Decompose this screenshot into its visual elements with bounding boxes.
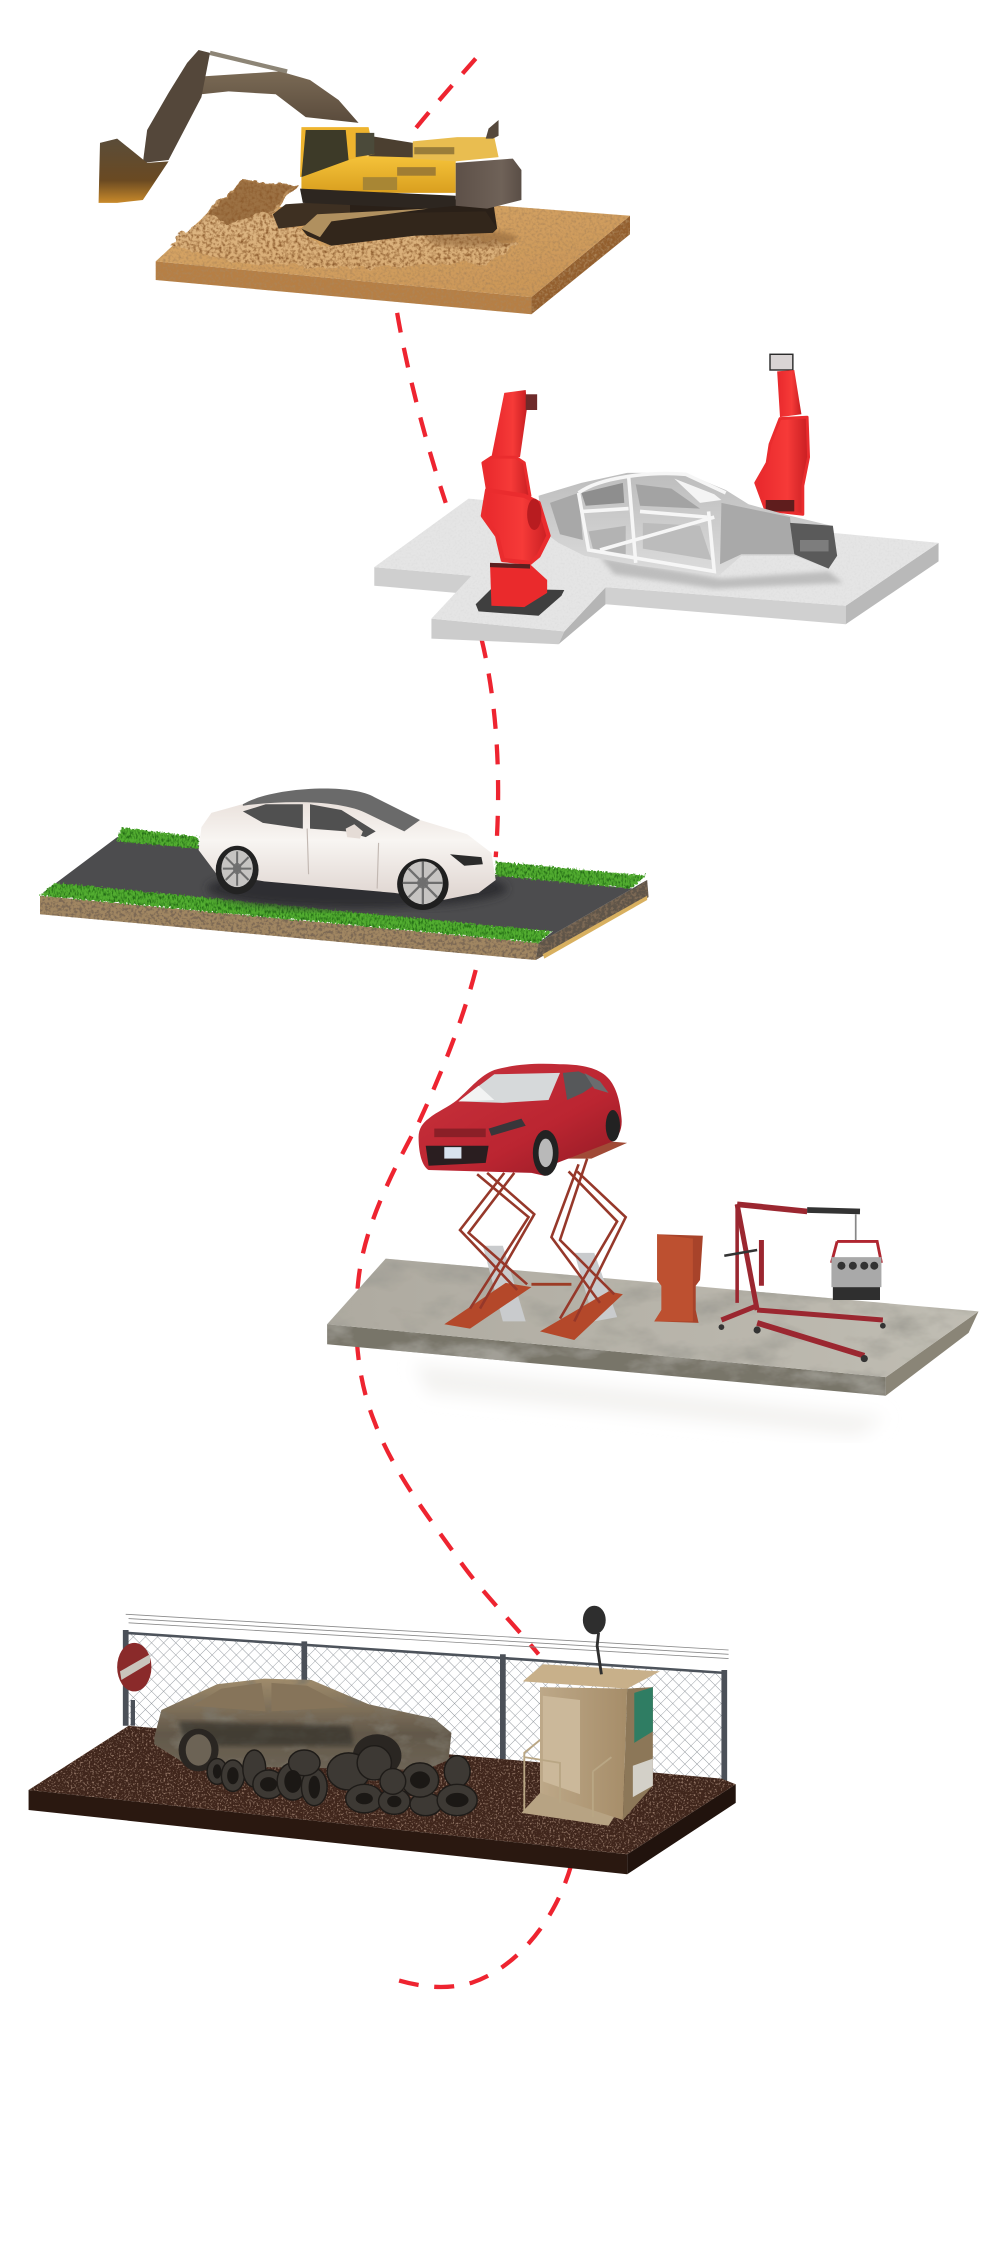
scene 5: scrapyard	[29, 1606, 736, 1874]
upper body	[301, 156, 456, 193]
front track	[301, 211, 497, 246]
grass strips	[117, 827, 199, 849]
searchlight	[583, 1606, 606, 1674]
excavator	[99, 50, 521, 246]
dirty windows	[193, 1683, 266, 1711]
sand mound	[169, 180, 520, 269]
front wall	[540, 1687, 627, 1820]
robot arm right	[756, 354, 809, 514]
car frame shadow	[600, 557, 843, 589]
side vents	[397, 167, 436, 176]
back track	[273, 200, 350, 229]
rear wheel	[216, 846, 259, 894]
red car	[419, 1064, 622, 1176]
scene 1: excavator on sand	[99, 50, 630, 314]
route segment 2	[397, 313, 446, 503]
roof	[523, 1664, 660, 1689]
scene 4: repair workshop	[327, 1064, 979, 1436]
cab	[300, 127, 374, 177]
door panel	[543, 1696, 580, 1794]
floor shadow	[414, 1364, 886, 1436]
top rail	[126, 1633, 724, 1673]
lift ram columns	[483, 1246, 526, 1321]
dipper arm	[143, 50, 210, 163]
concrete slab	[327, 1259, 979, 1396]
headlamp	[450, 854, 483, 866]
chain link mesh	[126, 1633, 724, 1783]
undercarriage shadow	[307, 197, 497, 229]
front wheel	[397, 859, 449, 910]
route segment 5	[397, 1864, 571, 1987]
engine hood	[413, 137, 499, 161]
robot arm left	[476, 390, 564, 616]
scissor arms	[460, 1159, 626, 1321]
wheels	[179, 1729, 219, 1771]
tire pile	[207, 1746, 477, 1816]
no entry sign	[117, 1643, 151, 1726]
roof and windows	[243, 789, 420, 831]
frame	[300, 189, 456, 209]
windshield	[459, 1073, 560, 1103]
bucket	[99, 139, 169, 203]
door line	[307, 829, 379, 889]
boom	[191, 71, 359, 123]
hydraulic cylinder	[210, 53, 287, 71]
casters	[861, 1355, 868, 1362]
barbed wire	[126, 1614, 729, 1659]
dashed route: from top through all stages	[356, 59, 571, 1987]
sand platform	[156, 180, 630, 314]
scene 3: white car on road	[40, 789, 649, 960]
guard booth	[521, 1606, 660, 1826]
road shadow	[207, 869, 507, 909]
road platform	[40, 827, 649, 960]
side wall	[623, 1687, 653, 1820]
rusted car	[154, 1679, 451, 1777]
base deck	[521, 1793, 623, 1826]
engine crane	[719, 1204, 886, 1362]
window openings	[581, 483, 624, 506]
railings	[524, 1740, 611, 1817]
scissor lift	[444, 1141, 627, 1340]
headlamp	[489, 1119, 526, 1136]
engine block	[831, 1257, 881, 1287]
route segment 1	[409, 59, 476, 137]
engine parts between cab and hood	[369, 136, 413, 160]
green window	[634, 1687, 653, 1743]
route segment 4	[356, 970, 539, 1654]
front subframe	[790, 523, 837, 569]
route segment 3	[481, 639, 498, 857]
counterweight	[456, 159, 521, 209]
car body frame	[539, 473, 837, 576]
engine sling	[831, 1241, 881, 1263]
pillars	[579, 474, 726, 571]
dark door band	[179, 1721, 354, 1746]
exhaust	[486, 120, 499, 139]
posts	[126, 1630, 724, 1783]
white car	[199, 789, 496, 910]
control pedestal	[654, 1234, 703, 1323]
grille	[434, 1129, 486, 1137]
engine bay	[720, 503, 794, 564]
wheels	[533, 1130, 559, 1176]
fence	[126, 1614, 729, 1783]
air conditioner	[633, 1759, 653, 1797]
car platform	[557, 1141, 627, 1159]
soil platform	[29, 1726, 736, 1874]
concrete platform	[374, 499, 939, 644]
side windows	[563, 1071, 600, 1100]
base plates	[444, 1283, 531, 1329]
scene 2: robot assembly	[374, 354, 939, 644]
